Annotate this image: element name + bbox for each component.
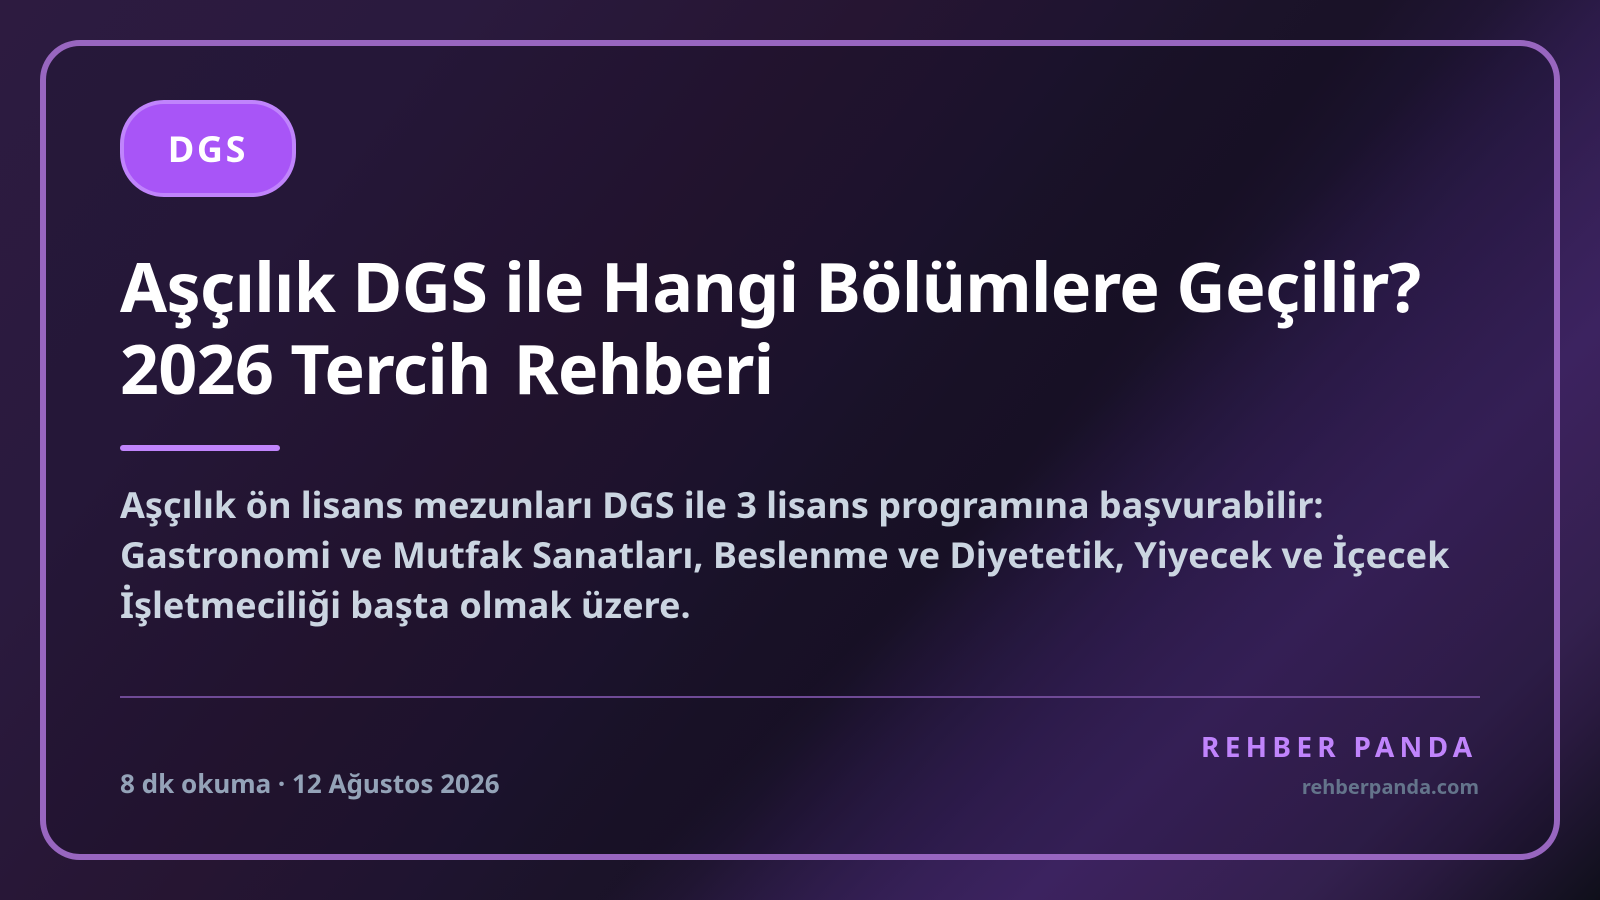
title: 2026 Tercih Rehberi	[120, 321, 774, 414]
reading time and date: 8 dk okuma · 12 Ağustos 2026	[120, 765, 500, 801]
description	[120, 480, 1450, 629]
description: Gastronomi ve Mutfak Sanatları, Beslenme ve Diyetetik, Yiyecek ve İçecek	[120, 530, 1449, 579]
title	[120, 239, 1421, 414]
divider	[120, 696, 1480, 698]
badge: DGS	[120, 100, 296, 197]
website: rehberpanda.com	[1302, 773, 1479, 800]
title: Aşçılık DGS ile Hangi Bölümlere Geçilir?	[120, 239, 1421, 332]
description: İşletmeciliği başta olmak üzere.	[120, 580, 691, 629]
badge: DGS: DGS	[168, 124, 248, 173]
brand name: REHBER PANDA	[1201, 728, 1478, 766]
description: Aşçılık ön lisans mezunları DGS ile 3 lisans programına başvurabilir:	[120, 480, 1324, 529]
accent rule	[120, 445, 280, 451]
